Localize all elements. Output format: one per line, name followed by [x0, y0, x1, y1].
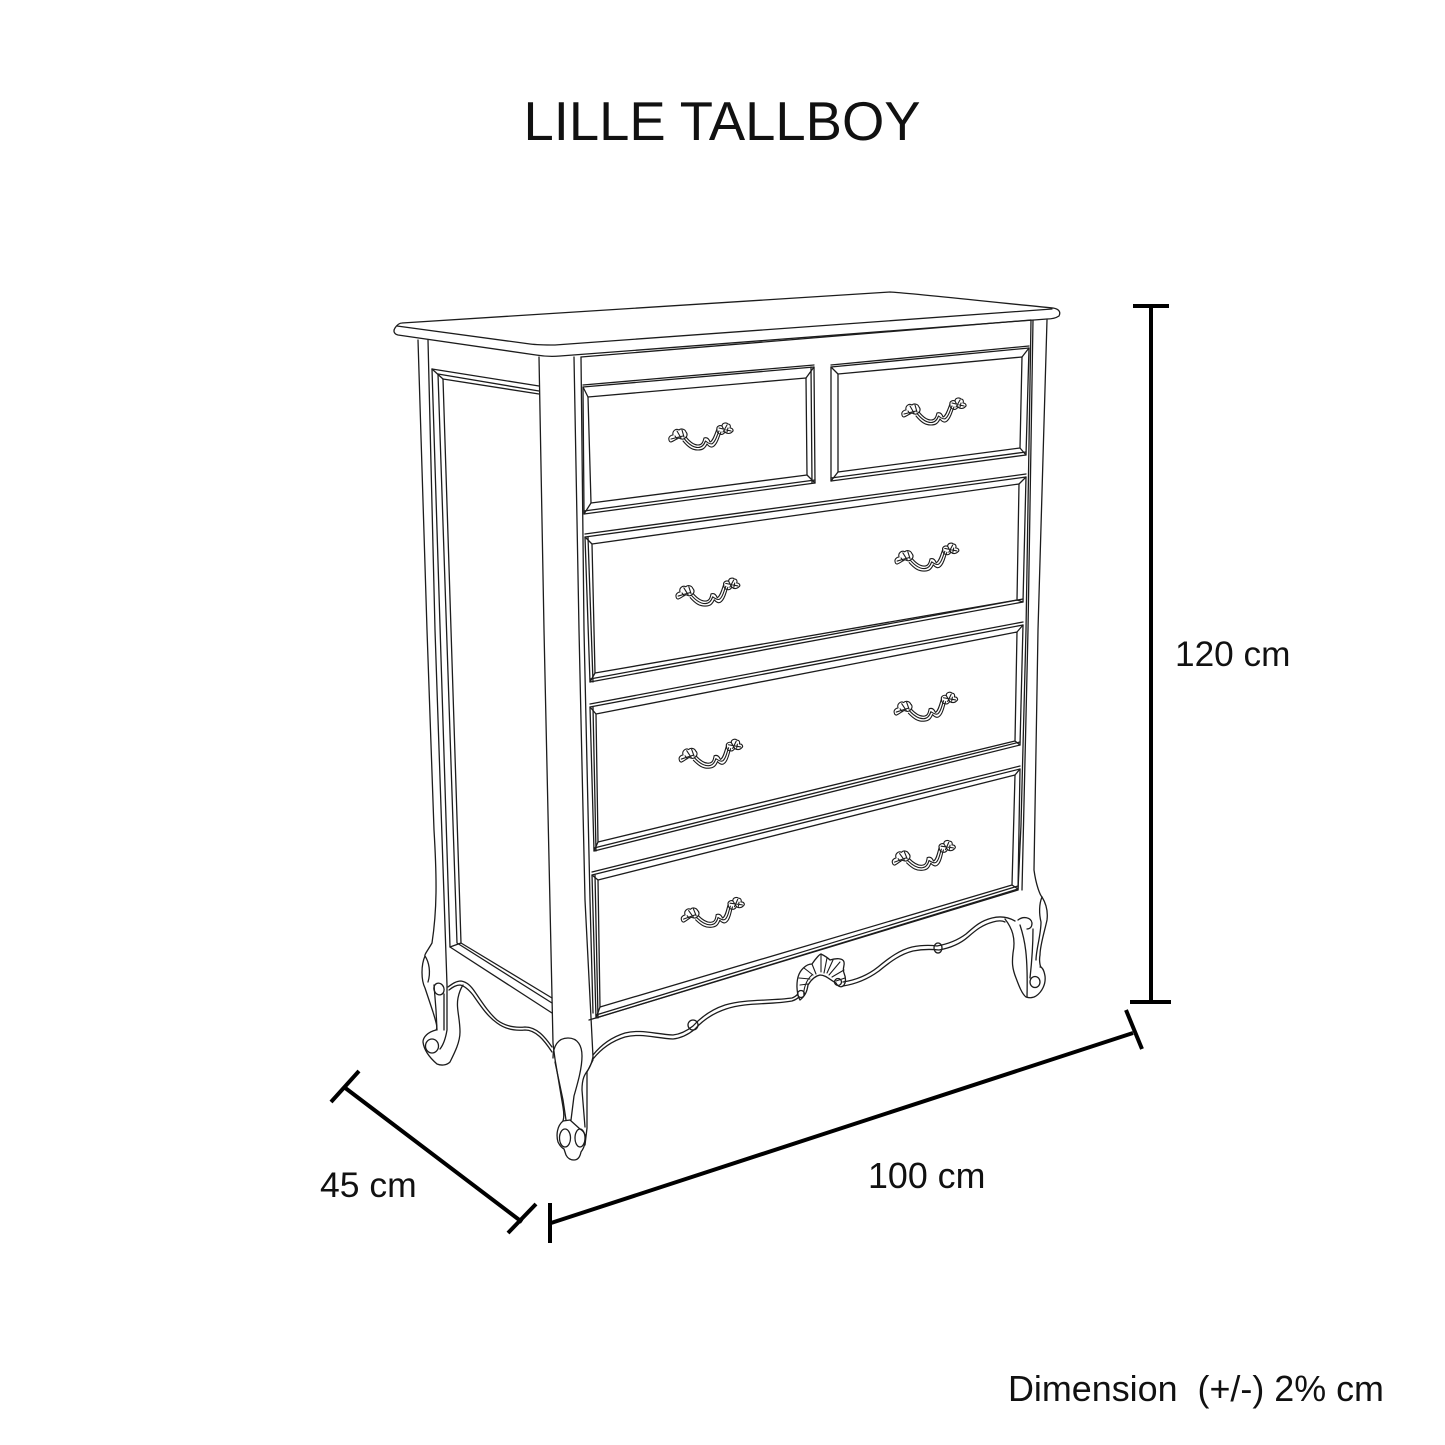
- front apron: [593, 917, 1015, 1059]
- back right leg foot: [1005, 897, 1045, 998]
- top left drawer: [583, 365, 815, 514]
- width dimension line: [550, 1010, 1142, 1243]
- depth dimension line: [331, 1071, 536, 1233]
- front frame rails: [581, 320, 1047, 1020]
- table top: [394, 292, 1060, 356]
- title: LILLE TALLBOY: [523, 91, 921, 152]
- drawer handles: [669, 398, 966, 930]
- fifth drawer: [592, 766, 1020, 1018]
- height label: 120 cm: [1175, 635, 1290, 674]
- side apron: [448, 981, 552, 1052]
- third drawer: [585, 474, 1026, 682]
- fourth drawer: [590, 622, 1023, 851]
- top right drawer: [831, 346, 1029, 481]
- front left leg: [539, 357, 593, 1160]
- tolerance note: Dimension (+/-) 2% cm: [1008, 1369, 1384, 1409]
- shell ornament: [797, 954, 846, 1000]
- tallboy line drawing: [394, 292, 1060, 1160]
- back left leg: [418, 340, 463, 1065]
- side panel: [432, 369, 552, 1013]
- height dimension line: [1130, 305, 1171, 1002]
- depth label: 45 cm: [320, 1165, 417, 1205]
- width label: 100 cm: [868, 1156, 985, 1196]
